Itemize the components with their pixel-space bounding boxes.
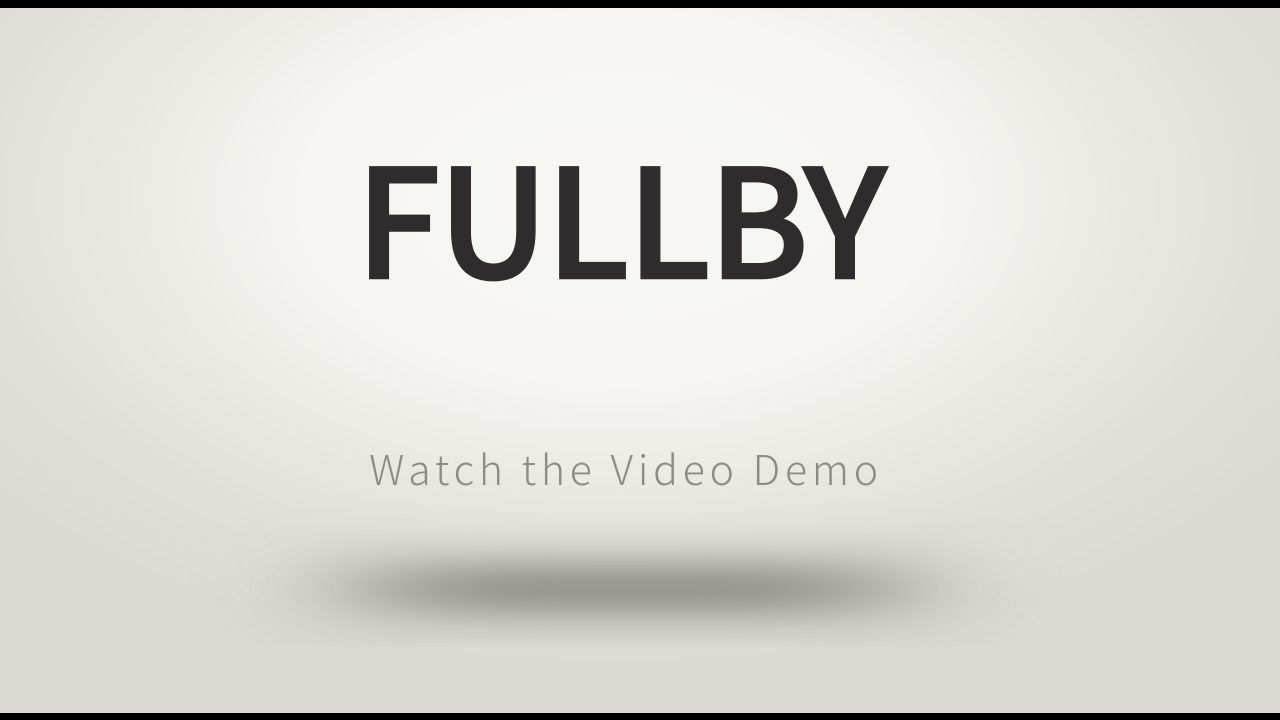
floating drop shadow	[278, 533, 982, 642]
subtitle: Watch the Video Demo	[369, 437, 883, 497]
title: FULLBY	[356, 105, 884, 322]
